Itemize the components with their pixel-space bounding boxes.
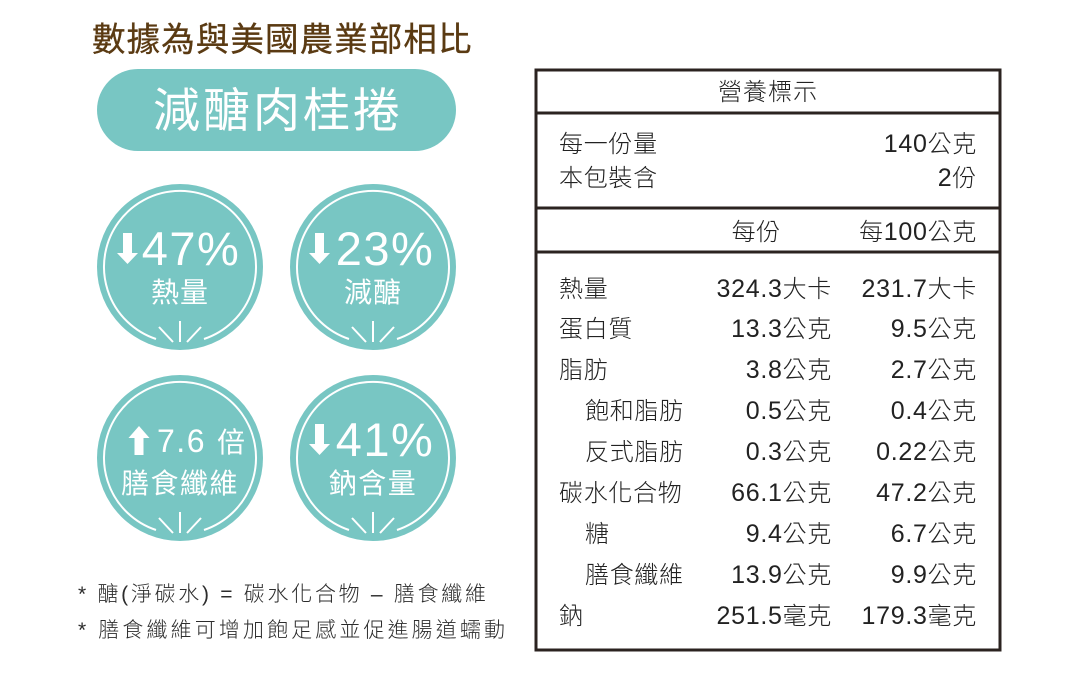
nutrient rows: 179.3毫克 <box>862 602 977 630</box>
nutrient rows: 251.5毫克 <box>717 602 832 630</box>
badge: sodium down 41% <box>290 375 456 541</box>
column headers <box>732 218 977 246</box>
column headers: 每100公克 <box>859 218 977 246</box>
serving info: 本包裝含 <box>559 165 658 192</box>
product name pill: 減醣肉桂捲 <box>153 84 403 137</box>
badge: sodium down 41%: 41% <box>336 413 434 466</box>
badge: calories down 47%: 47% <box>142 222 240 275</box>
nutrient rows: 3.8公克 <box>746 356 832 384</box>
nutrient rows: 9.9公克 <box>891 561 977 589</box>
nutrient rows: 13.9公克 <box>731 561 832 589</box>
nutrient rows: 47.2公克 <box>876 479 977 507</box>
nutrient rows: 蛋白質 <box>559 316 633 343</box>
nutrient rows: 9.5公克 <box>891 315 977 343</box>
nutrient rows: 13.3公克 <box>731 315 832 343</box>
nutrient rows: 鈉 <box>559 603 584 630</box>
nutrient rows: 熱量 <box>559 276 608 303</box>
table frame <box>536 70 1000 650</box>
nutrient rows: 0.4公克 <box>891 397 977 425</box>
badge: carbs down 23%: 減醣 <box>344 277 402 308</box>
badge: calories down 47% <box>97 184 263 350</box>
badge: sodium down 41%: 鈉含量 <box>329 468 417 499</box>
nutrition table <box>536 70 1000 650</box>
nutrient rows: 0.3公克 <box>746 438 832 466</box>
footnotes: * 膳食纖維可增加飽足感並促進腸道蠕動 <box>78 619 505 642</box>
badge: fiber up 7.6 times <box>97 375 263 541</box>
badge: fiber up 7.6 times: 倍 <box>217 427 245 458</box>
nutrient rows: 飽和脂肪 <box>585 398 684 425</box>
nutrient rows: 66.1公克 <box>731 479 832 507</box>
badge: carbs down 23%: 23% <box>336 222 434 275</box>
nutrient rows: 6.7公克 <box>891 520 977 548</box>
nutrient rows: 膳食纖維 <box>585 562 684 589</box>
title: 數據為與美國農業部相比 <box>92 22 473 59</box>
nutrient rows: 糖 <box>585 521 610 548</box>
nutrient rows: 324.3大卡 <box>717 275 832 303</box>
badge: fiber up 7.6 times: 膳食纖維 <box>121 468 239 499</box>
nutrient rows: 0.5公克 <box>746 397 832 425</box>
nutrient rows: 反式脂肪 <box>585 439 684 466</box>
product name pill <box>97 69 456 151</box>
column headers: 每份 <box>732 219 781 246</box>
nutrient rows: 脂肪 <box>559 357 608 384</box>
badge: calories down 47%: 熱量 <box>151 277 209 308</box>
nutrient rows <box>559 275 977 630</box>
nutrient rows: 碳水化合物 <box>559 480 682 507</box>
serving info: 每一份量 <box>559 131 658 158</box>
nutrient rows: 2.7公克 <box>891 356 977 384</box>
nutrient rows: 0.22公克 <box>876 438 977 466</box>
footnotes <box>78 583 505 642</box>
badge: carbs down 23% <box>290 184 456 350</box>
nutrient rows: 9.4公克 <box>746 520 832 548</box>
serving info: 2份 <box>938 164 977 192</box>
table heading: 營養標示 <box>718 79 818 106</box>
serving info <box>559 130 977 192</box>
serving info: 140公克 <box>884 130 977 158</box>
badge: fiber up 7.6 times: 7.6 <box>157 423 206 459</box>
nutrient rows: 231.7大卡 <box>862 275 977 303</box>
footnotes: * 醣(淨碳水) = 碳水化合物 – 膳食纖維 <box>78 583 486 606</box>
